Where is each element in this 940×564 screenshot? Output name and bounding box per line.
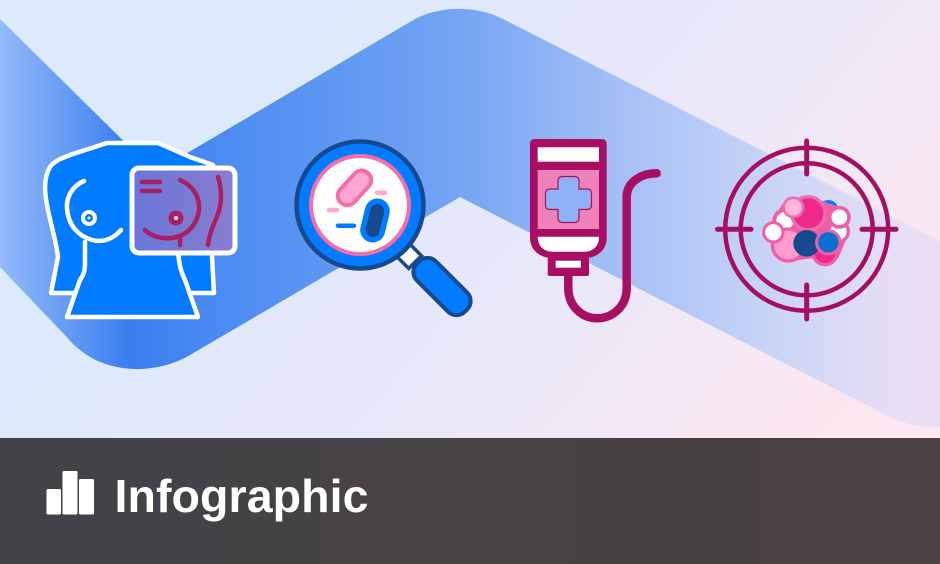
- background gradient: [0, 0, 940, 438]
- icon: target on cell cluster: [718, 141, 896, 319]
- torso front: [67, 225, 198, 317]
- lens: [296, 142, 424, 268]
- pink label: [538, 170, 599, 229]
- icon: torso with mammogram: [45, 143, 235, 317]
- cell cluster: [764, 197, 850, 265]
- bacteria: [329, 180, 385, 230]
- nipple: [83, 212, 95, 224]
- zigzag ribbon: [0, 9, 940, 427]
- cross: [546, 176, 592, 222]
- top window: [538, 147, 599, 162]
- icon: IV bag: [530, 139, 657, 318]
- lower window: [538, 237, 599, 252]
- connector: [548, 255, 589, 276]
- breast outline: [67, 181, 121, 241]
- mammogram panel: [132, 168, 235, 253]
- heading: Infographic: [114, 470, 368, 522]
- icon: bar chart: [46, 471, 94, 514]
- footer bar: [0, 438, 940, 564]
- handle neck: [395, 242, 421, 268]
- crosshair rings: [718, 141, 896, 319]
- bag body: [530, 139, 607, 258]
- torso back: [45, 143, 222, 293]
- handle: [408, 253, 476, 320]
- tube: [568, 173, 657, 318]
- icon: magnifying glass with bacteria: [296, 142, 476, 320]
